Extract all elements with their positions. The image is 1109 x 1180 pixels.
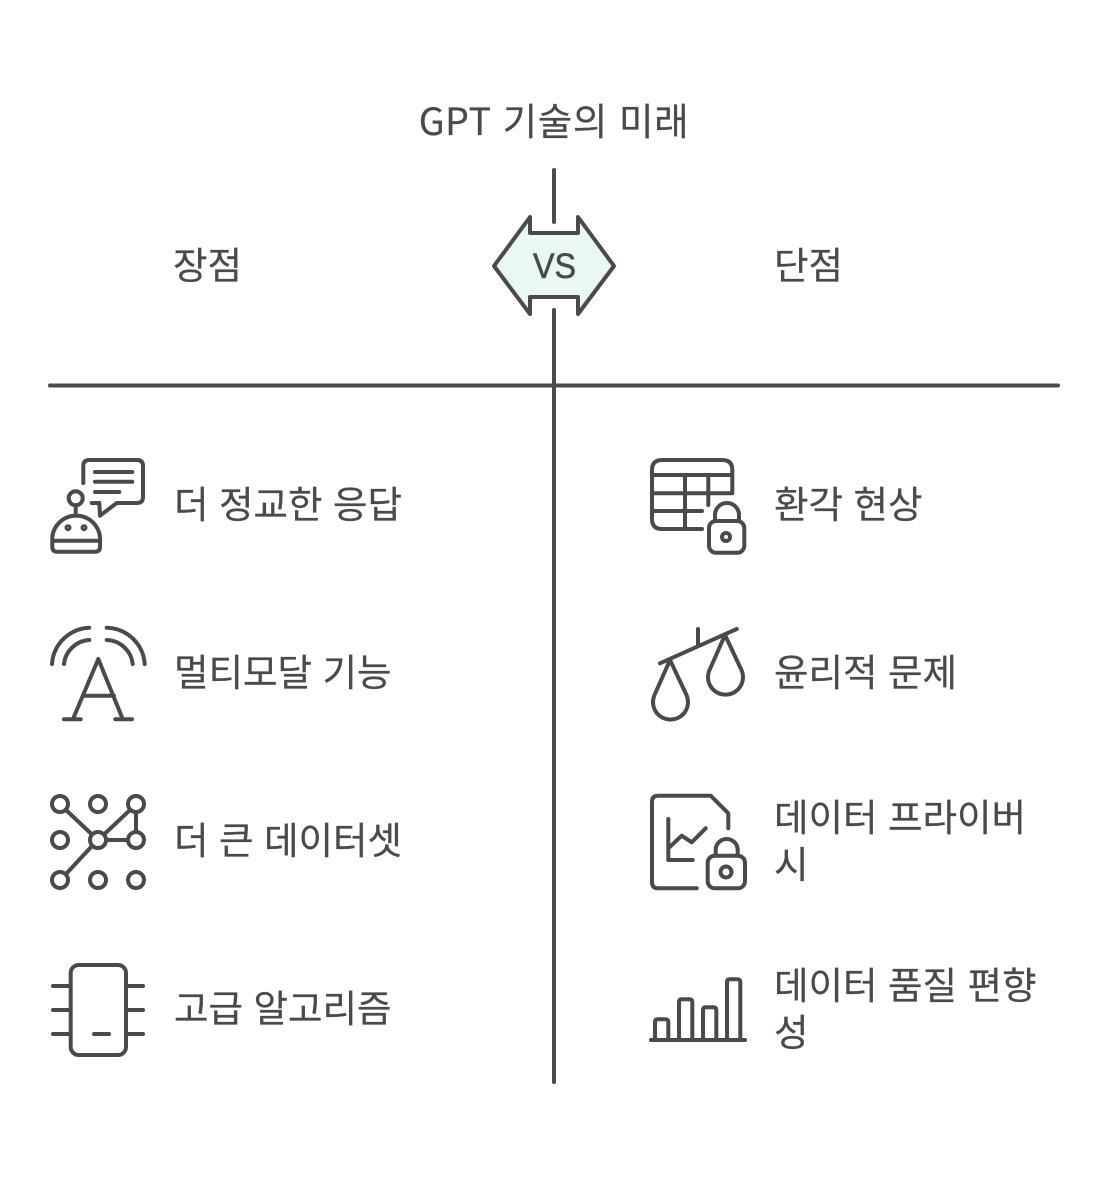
- icon: chip: [53, 965, 143, 1055]
- icon: bar chart: [651, 979, 745, 1040]
- icon: balance scales: [653, 629, 743, 720]
- label: data privacy: 시: [774, 834, 808, 889]
- icon: antenna: [52, 628, 145, 719]
- label: advanced algorithms: 고급 알고리즘: [174, 978, 392, 1033]
- label: larger datasets: 더 큰 데이터셋: [174, 810, 402, 865]
- label: more refined responses: 더 정교한 응답: [174, 474, 402, 529]
- label: ethical issues: 윤리적 문제: [774, 642, 957, 697]
- icon: network nodes: [52, 796, 144, 888]
- title: GPT 기술의 미래: [419, 91, 689, 146]
- label: multimodal capability: 멀티모달 기능: [174, 642, 392, 697]
- icon: robot chat: [52, 460, 143, 552]
- vs badge: [494, 217, 614, 314]
- heading: disadvantages: 단점: [774, 235, 843, 290]
- horizontal divider: [50, 384, 1058, 388]
- icon: document chart with lock: [652, 796, 745, 888]
- label: data quality bias: 성: [774, 1002, 808, 1057]
- icon: table with lock: [652, 460, 744, 553]
- vertical divider: [552, 170, 556, 1082]
- label: data privacy: 데이터 프라이버: [774, 787, 1026, 842]
- label: hallucination: 환각 현상: [774, 474, 922, 529]
- label: data quality bias: 데이터 품질 편향: [774, 955, 1036, 1010]
- heading: advantages: 장점: [173, 235, 242, 290]
- vs badge: VS: [533, 247, 576, 286]
